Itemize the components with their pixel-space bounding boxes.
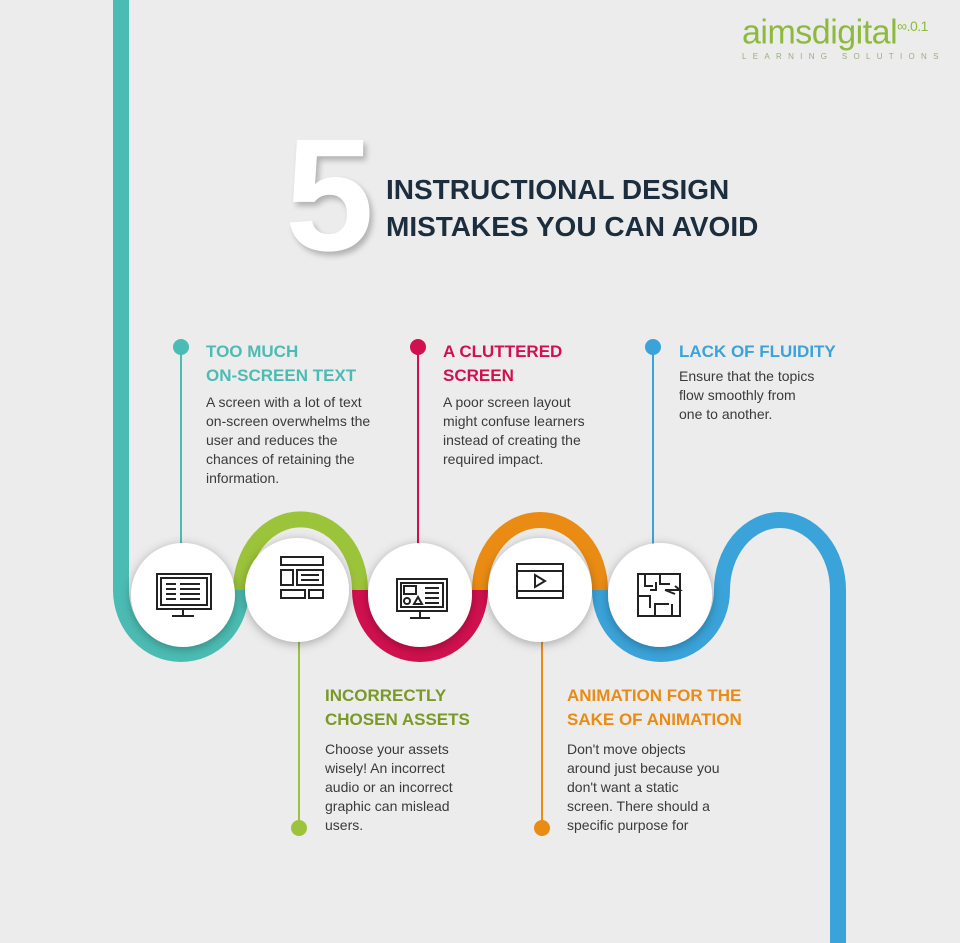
connectors [181, 347, 653, 828]
text: lack of fluidity: flow smoothly from [679, 387, 796, 403]
text: animation [567, 686, 742, 833]
text: animation: around just because you [567, 760, 720, 776]
text: animation: SAKE OF ANIMATION [567, 710, 742, 729]
text: animation: screen. There should a [567, 798, 710, 814]
text: too much on-screen text [206, 342, 370, 486]
text: cluttered screen: A CLUTTERED [443, 342, 562, 361]
title [285, 105, 758, 284]
text: cluttered screen: SCREEN [443, 366, 514, 385]
text: lack of fluidity: one to another. [679, 406, 772, 422]
text: cluttered screen: required impact. [443, 451, 543, 467]
text: incorrectly chosen assets: Choose your assets [325, 741, 449, 757]
text: animation: specific purpose for [567, 817, 688, 833]
text: incorrectly chosen assets: users. [325, 817, 363, 833]
text: cluttered screen: might confuse learners [443, 413, 585, 429]
text: animation: ANIMATION FOR THE [567, 686, 741, 705]
title: 5 [285, 105, 374, 284]
text: too much on-screen text: information. [206, 470, 279, 486]
text: too much on-screen text: on-screen overwhelms the [206, 413, 370, 429]
text: animation: Don't move objects [567, 741, 686, 757]
text: too much on-screen text: TOO MUCH [206, 342, 298, 361]
title: MISTAKES YOU CAN AVOID [386, 211, 758, 242]
text: cluttered screen: A poor screen layout [443, 394, 571, 410]
text: animation: don't want a static [567, 779, 679, 795]
text: too much on-screen text: user and reduces the [206, 432, 338, 448]
logo: LEARNING SOLUTIONS [742, 52, 945, 61]
text: incorrectly chosen assets [325, 686, 470, 833]
text: cluttered screen [443, 342, 585, 467]
text: incorrectly chosen assets: audio or an incorrect [325, 779, 453, 795]
text: incorrectly chosen assets: CHOSEN ASSETS [325, 710, 470, 729]
text: too much on-screen text: ON-SCREEN TEXT [206, 366, 356, 385]
text: incorrectly chosen assets: graphic can mislead [325, 798, 450, 814]
text: incorrectly chosen assets: wisely! An incorrect [325, 760, 445, 776]
icons [157, 557, 680, 618]
text: lack of fluidity: LACK OF FLUIDITY [679, 342, 836, 361]
text: too much on-screen text: A screen with a lot of text [206, 394, 362, 410]
text: incorrectly chosen assets: INCORRECTLY [325, 686, 446, 705]
text: cluttered screen: instead of creating the [443, 432, 581, 448]
logo: aimsdigital∞.0.1 [742, 13, 928, 51]
title: INSTRUCTIONAL DESIGN [386, 174, 729, 205]
text: lack of fluidity [679, 342, 836, 422]
text: too much on-screen text: chances of retaining the [206, 451, 355, 467]
text: lack of fluidity: Ensure that the topics [679, 368, 814, 384]
